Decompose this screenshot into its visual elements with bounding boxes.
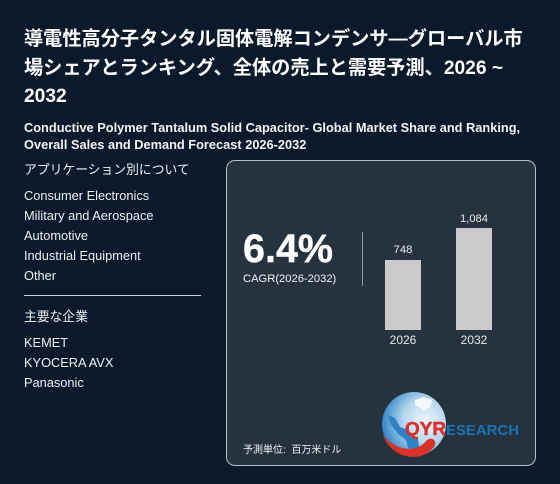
application list: Automotive xyxy=(24,228,88,243)
icon: globe xyxy=(382,392,446,457)
value 2032: 1,084 xyxy=(460,213,488,225)
year 2026: 2026 xyxy=(390,333,416,347)
logo: QYResearch xyxy=(382,392,519,457)
heading: key companies: 主要な企業 xyxy=(24,309,88,324)
bar chart xyxy=(385,213,492,347)
CAGR value: 6.4% xyxy=(243,227,333,271)
forecast unit note: 予測単位: 百万米ドル xyxy=(243,445,341,456)
panel: forecast xyxy=(226,160,536,466)
company list xyxy=(24,335,114,390)
bar 2032 xyxy=(456,228,492,330)
company list: KEMET xyxy=(24,335,68,350)
application list xyxy=(24,188,153,283)
title: 導電性高分子タンタル固体電解コンデンサ―グローバル市 xyxy=(24,29,523,50)
year 2032: 2032 xyxy=(461,333,487,347)
subtitle: Conductive Polymer Tantalum Solid Capacitor- Global Market Share and Ranking, xyxy=(24,120,520,135)
application list: Other xyxy=(24,268,56,283)
company list: Panasonic xyxy=(24,375,84,390)
company list: KYOCERA AVX xyxy=(24,355,113,370)
application list: Consumer Electronics xyxy=(24,188,149,203)
bar 2026 xyxy=(385,260,421,330)
value 2026: 748 xyxy=(394,244,412,256)
subtitle: Overall Sales and Demand Forecast 2026-2032 xyxy=(24,137,306,152)
application list: Military and Aerospace xyxy=(24,208,153,223)
logo: QYResearch: ESEARCH xyxy=(446,422,519,439)
title xyxy=(24,28,523,107)
CAGR label: CAGR(2026-2032) xyxy=(243,273,336,285)
logo wordmark: QYR xyxy=(405,419,446,439)
title: 場シェアとランキング、全体の売上と需要予測、2026 ~ xyxy=(24,58,503,78)
heading: applications: アプリケーション別について xyxy=(24,162,190,177)
title: 2032 xyxy=(24,86,67,107)
subtitle xyxy=(24,120,520,152)
application list: Industrial Equipment xyxy=(24,248,141,263)
